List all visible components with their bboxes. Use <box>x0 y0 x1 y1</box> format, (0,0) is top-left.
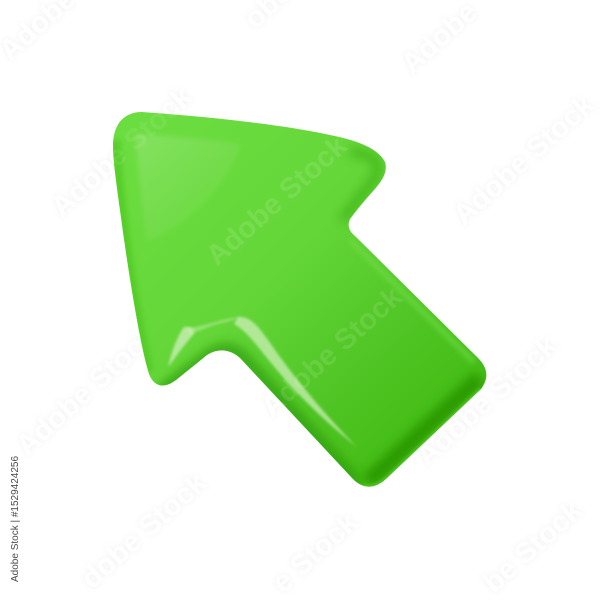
watermarks on arrow <box>113 114 404 406</box>
watermark: lower centre: Adobe Stock <box>255 280 409 423</box>
arrow <box>113 112 486 487</box>
dark right notch shade <box>342 152 378 220</box>
watermark: bottom left: dobe Stock <box>75 466 213 595</box>
light right edge <box>350 240 474 362</box>
glossy reflection: arc <box>186 317 240 335</box>
watermark: bottom centre: e Stock <box>266 506 365 599</box>
glossy reflection: ridge <box>234 317 357 447</box>
glossy reflection: upper left <box>135 134 241 241</box>
left rim <box>116 140 150 372</box>
dark lower notch shade <box>160 349 358 484</box>
watermark: on arrow upper left: Adobe Stock <box>45 80 199 223</box>
watermark: lower right: Adobe Stock <box>410 329 564 472</box>
watermark: on arrow lower: Adobe Stock <box>255 280 409 423</box>
dark bottom edge shade <box>368 378 480 482</box>
watermark: lower left: Adobe Stock <box>10 319 164 462</box>
arrow shading <box>116 140 481 487</box>
stock id caption: Adobe Stock | #1529424256 <box>10 456 21 582</box>
watermark: upper left: Adobe Stock <box>45 80 199 223</box>
watermark: bottom right: be Stock <box>477 494 589 599</box>
glossy reflection: lower left wedge <box>168 327 194 367</box>
watermark: on arrow centre: Adobe Stock <box>200 129 354 272</box>
light bottom rim <box>362 389 481 487</box>
watermark: right: Adobe Stock <box>447 88 600 231</box>
arrow body <box>113 112 486 487</box>
